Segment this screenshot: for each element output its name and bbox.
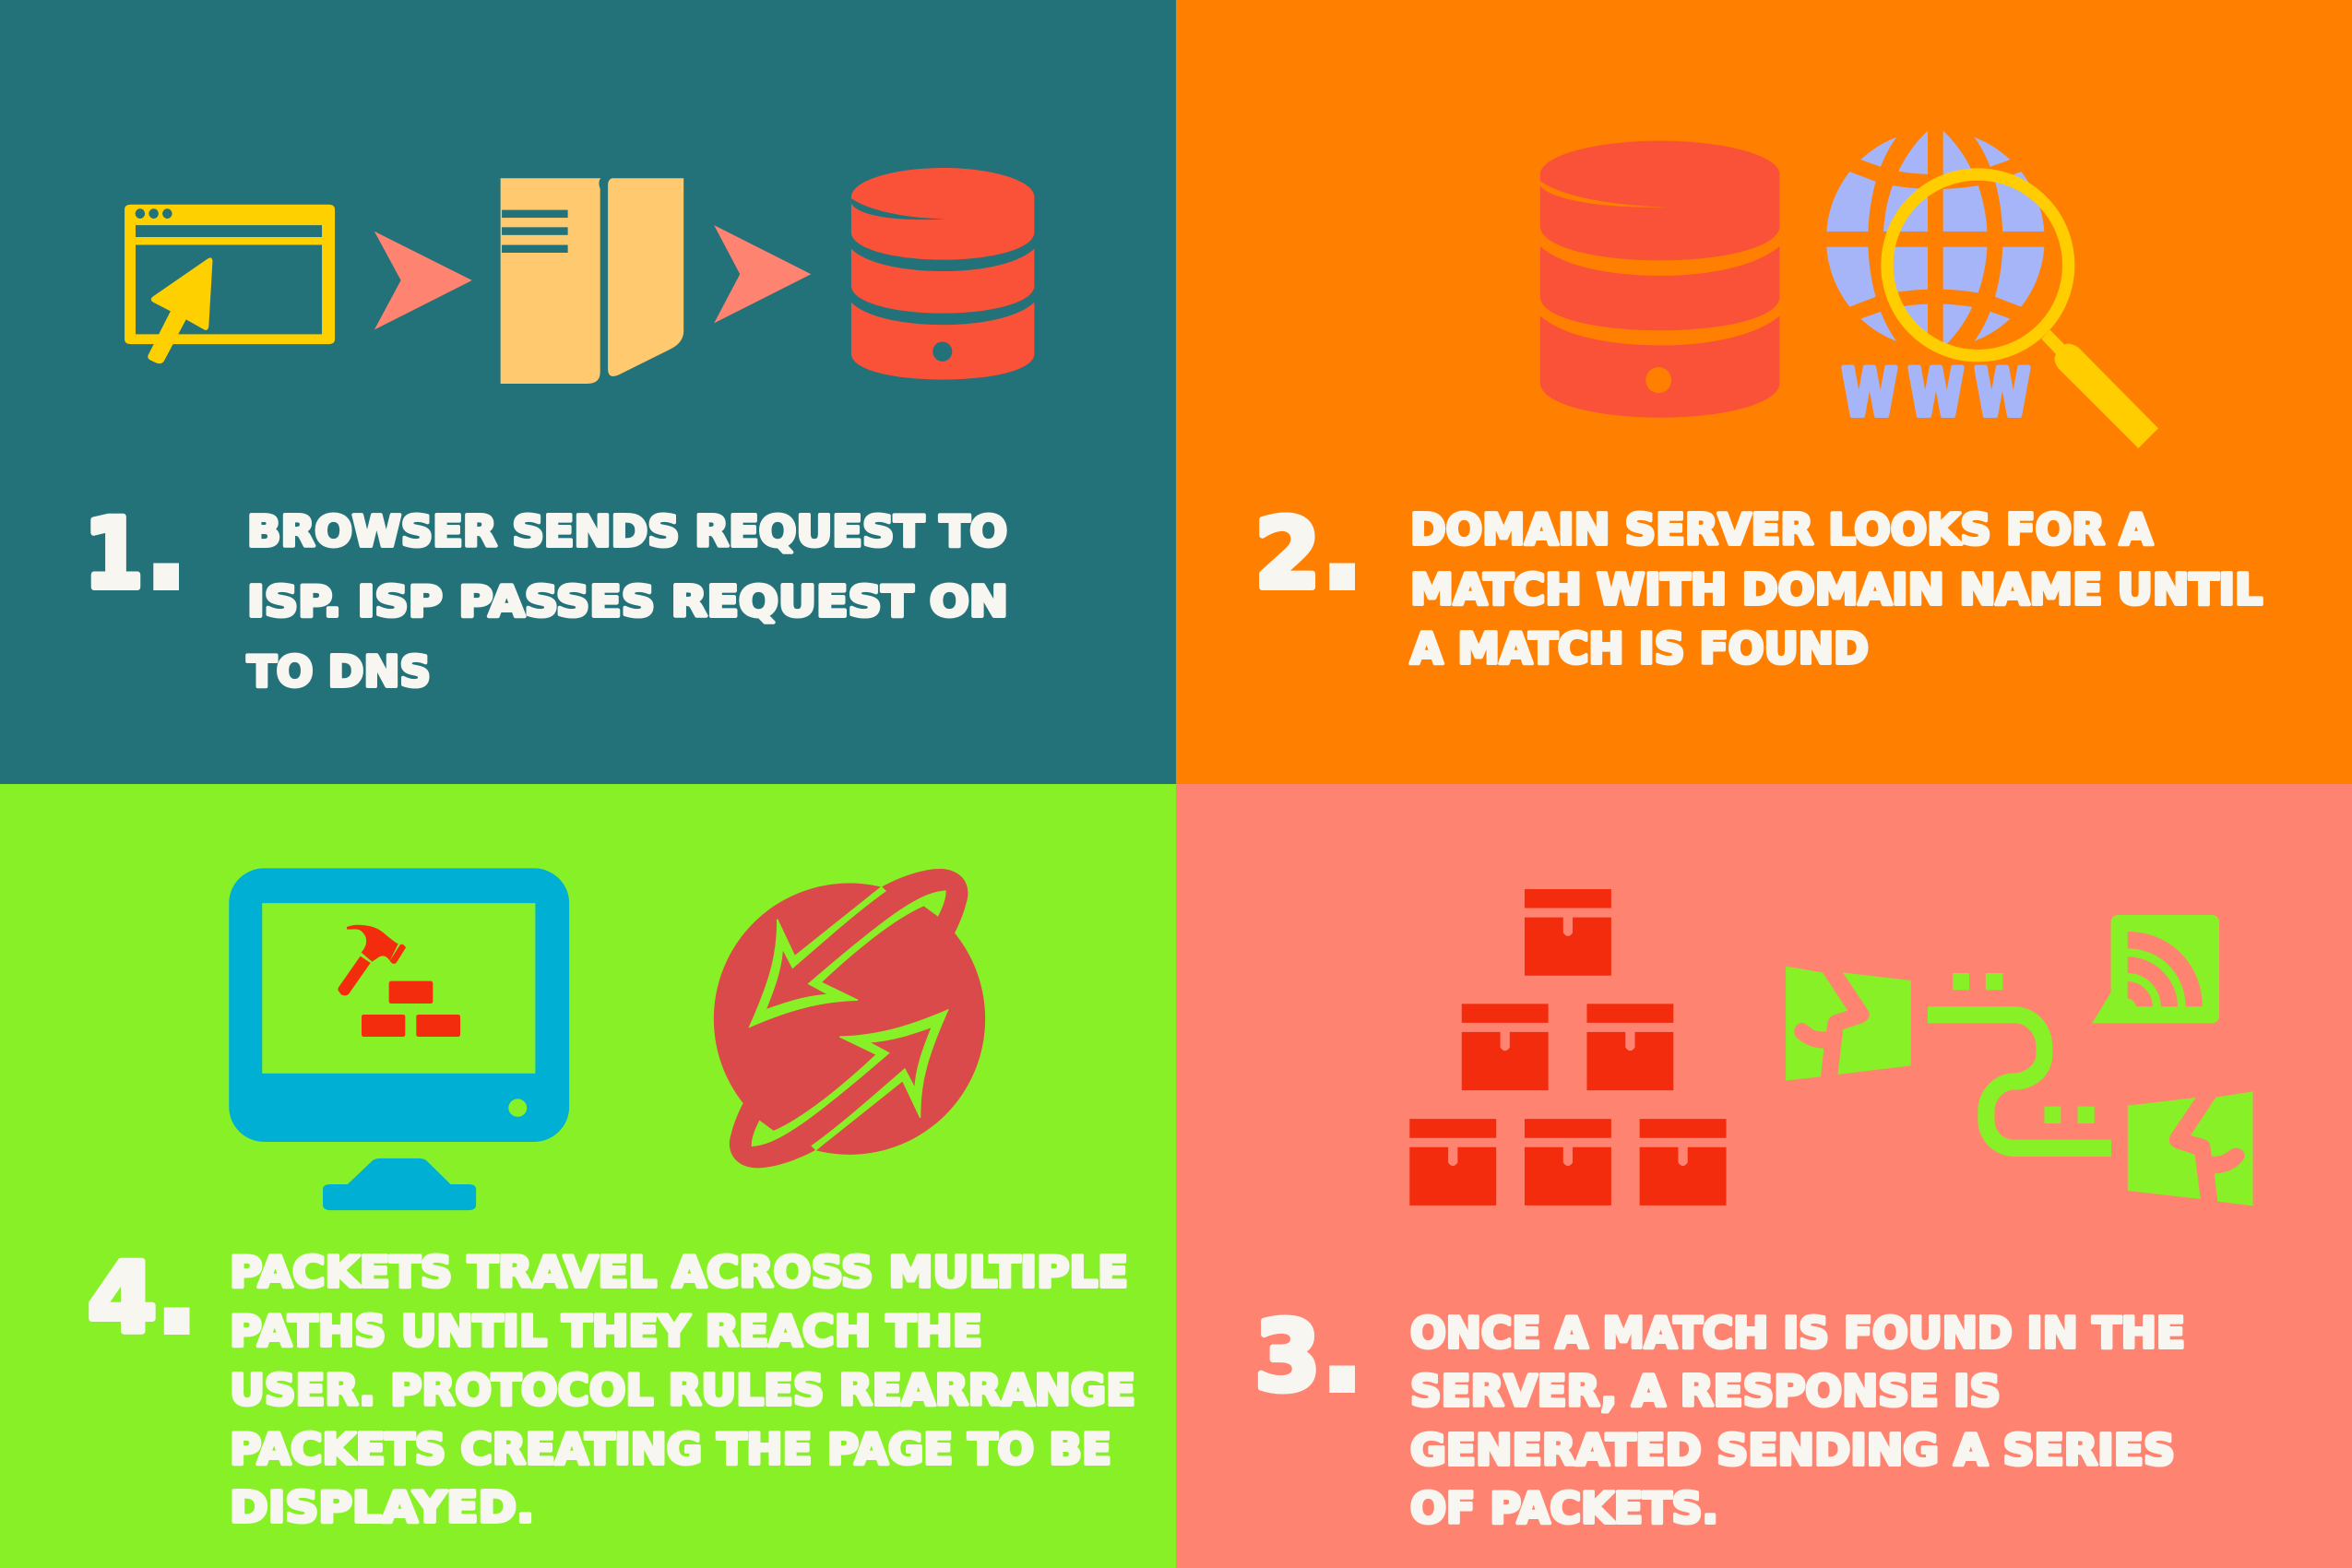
text block: step 2: A MATCH IS FOUND (1410, 624, 1869, 673)
panel: step 3 response packets (1176, 784, 2352, 1568)
text block: step 3: ONCE A MATCH IS FOUND IN THE (1410, 1308, 2185, 1358)
text block: step 4: DISPLAYED. (230, 1482, 534, 1532)
icon: database (1540, 141, 1779, 418)
text block: step 3: SERVER, A RESPONSE IS (1410, 1366, 2001, 1416)
text block: step 4: USER. PROTOCOL RULES REARRANGE (230, 1365, 1135, 1415)
panel: step 1 browser request (0, 0, 1176, 784)
text block: step 3: GENERATED SENDING A SERIES (1410, 1425, 2175, 1475)
text block: step 4 (230, 1247, 1135, 1532)
text block: step 3 (1410, 1308, 2185, 1533)
icon label: www (1842, 355, 2030, 431)
text block: step 1: TO DNS (247, 647, 431, 696)
text block: step 4: PACKETS TRAVEL ACROSS MULTIPLE (230, 1247, 1128, 1297)
text block: step 3: OF PACKETS. (1410, 1483, 1718, 1533)
text block: step 2 (1410, 505, 2263, 673)
step number 1 (84, 473, 190, 618)
icon: ISP book (501, 178, 683, 384)
arrow: browser to book (374, 232, 472, 330)
step number 2 (1254, 473, 1366, 618)
arrow: book to database (714, 225, 811, 323)
icon: network route with feed (1786, 915, 2252, 1206)
step number 2: 2 (1254, 498, 1321, 611)
step number 3: . (1319, 1276, 1366, 1420)
step number 4: 4 (88, 1241, 157, 1354)
panel: step 2 domain server lookup (1176, 0, 2352, 784)
text block: step 4: PACKETS CREATING THE PAGE TO BE (230, 1424, 1111, 1474)
step number 4: . (153, 1218, 200, 1362)
icon: hammer and bricks (338, 925, 460, 1037)
step number 2: . (1319, 473, 1366, 618)
text block: step 1 (247, 506, 1008, 696)
icon label: www: W (1975, 355, 2030, 431)
panel: step 4 packets travel (0, 784, 1176, 1568)
icon: database (851, 168, 1034, 380)
step number 4 (88, 1218, 200, 1362)
text block: step 2: DOMAIN SERVER LOOKS FOR A (1410, 505, 2153, 554)
step number 3 (1254, 1276, 1366, 1420)
step number 1: . (142, 473, 190, 618)
icon: globe with magnifier (1820, 126, 2158, 448)
text block: step 1: ISP. ISP PASSES REQUEST ON (247, 576, 1008, 626)
icon: globe with orbit arrows (714, 869, 985, 1168)
icon: browser window with cursor (125, 205, 335, 363)
icon: stack of packet boxes (1409, 889, 1727, 1206)
text block: step 4: PATHS UNTIL THEY REACH THE (230, 1306, 982, 1356)
icon: monitor (229, 868, 569, 1210)
icon label: www: W (1842, 355, 1897, 431)
text block: step 1: BROWSER SENDS REQUEST TO (247, 506, 1007, 556)
step number 3: 3 (1254, 1301, 1321, 1413)
icon label: www: W (1908, 355, 1964, 431)
text block: step 2: MATCH WITH DOMAIN NAME UNTIL (1410, 564, 2263, 614)
step number 1: 1 (84, 498, 144, 611)
